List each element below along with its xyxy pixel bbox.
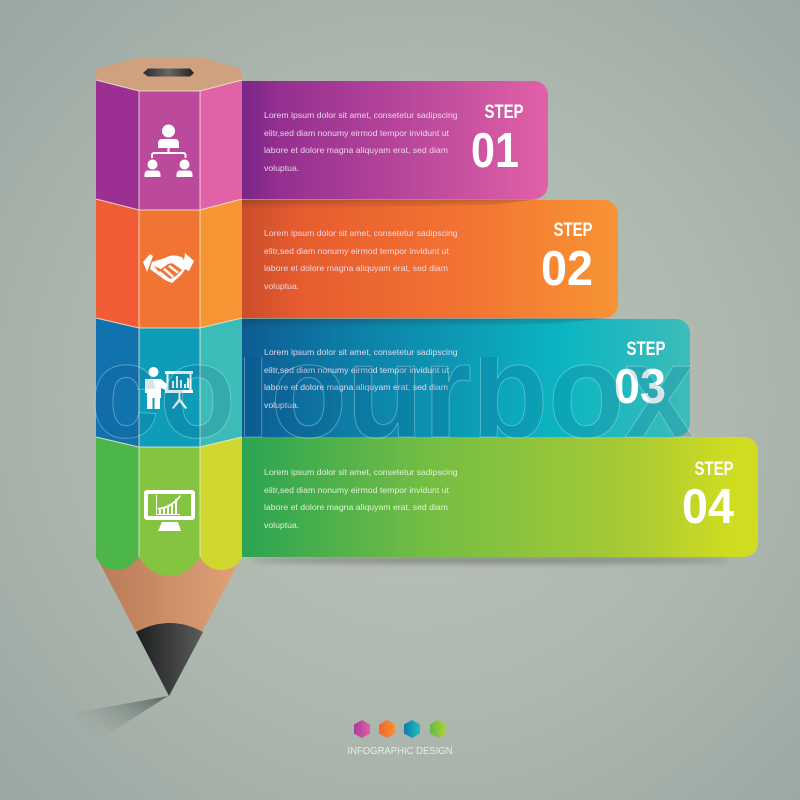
pencil segment 1 — [96, 80, 242, 210]
panel: step 4 — [242, 437, 758, 557]
caption: INFOGRAPHIC DESIGN — [348, 746, 452, 757]
step 4 description: elitr,sed diam nonumy eirmod tempor invidunt ut — [264, 485, 450, 495]
step 1 description: elitr,sed diam nonumy eirmod tempor invidunt ut — [264, 128, 450, 138]
step 4 label: STEP — [694, 459, 734, 480]
pencil wood tip — [96, 556, 242, 695]
pencil facet lines — [96, 80, 242, 557]
pencil — [96, 57, 242, 696]
panel: step 1 — [242, 81, 548, 199]
pencil cap hole — [143, 68, 194, 76]
step 1 description: Lorem ipsum dolor sit amet, consetetur sadipscing — [264, 110, 458, 120]
pencil segment 3 — [96, 318, 242, 447]
step 2 description: labore et dolore magna aliquyam erat, sed diam — [264, 263, 448, 273]
icon: presenter with board — [145, 367, 193, 409]
step 3 description: Lorem ipsum dolor sit amet, consetetur sadipscing — [264, 347, 458, 357]
pencil segment 4 — [96, 437, 242, 576]
panel: step 2 — [242, 199, 618, 318]
legend hexagons — [354, 720, 446, 738]
pencil segment 2 — [96, 199, 242, 328]
step 3 description: elitr,sed diam nonumy eirmod tempor invidunt ut — [264, 365, 450, 375]
step 2 label: STEP — [554, 220, 593, 241]
step 1 label: STEP — [484, 102, 524, 123]
icon: organisation chart — [144, 124, 192, 177]
watermark: colourbox: colourbox — [90, 317, 694, 466]
step 2 shadow from step 1 — [242, 199, 540, 209]
step 3 shadow from step 2 — [242, 318, 610, 328]
step 1 description: labore et dolore magna aliquyam erat, sed diam — [264, 145, 448, 155]
shadow beneath step 4 ribbon — [250, 556, 730, 564]
step 3 label: STEP — [626, 339, 666, 360]
step 4 description: voluptua. — [264, 520, 299, 530]
step 4 description: labore et dolore magna aliquyam erat, sed diam — [264, 502, 448, 512]
pencil tip shadow — [74, 696, 168, 753]
icon: handshake — [143, 253, 194, 283]
step 2 number: 02 — [541, 242, 593, 296]
icon: monitor with rising chart — [144, 490, 195, 531]
step 2 description: voluptua. — [264, 281, 299, 291]
step 1 description: voluptua. — [264, 163, 299, 173]
pencil lead — [136, 623, 203, 696]
step 4 number: 04 — [682, 480, 734, 534]
step 4 description: Lorem ipsum dolor sit amet, consetetur sadipscing — [264, 467, 458, 477]
step 1 number: 01 — [471, 124, 519, 178]
step 2 description: elitr,sed diam nonumy eirmod tempor invidunt ut — [264, 246, 450, 256]
panel: step 3 — [242, 318, 690, 437]
step 2 description: Lorem ipsum dolor sit amet, consetetur sadipscing — [264, 228, 458, 238]
step 3 description: labore et dolore magna aliquyam erat, sed diam — [264, 382, 448, 392]
step 3 number: 03 — [614, 360, 666, 414]
pencil cap — [96, 57, 242, 91]
step 3 description: voluptua. — [264, 400, 299, 410]
